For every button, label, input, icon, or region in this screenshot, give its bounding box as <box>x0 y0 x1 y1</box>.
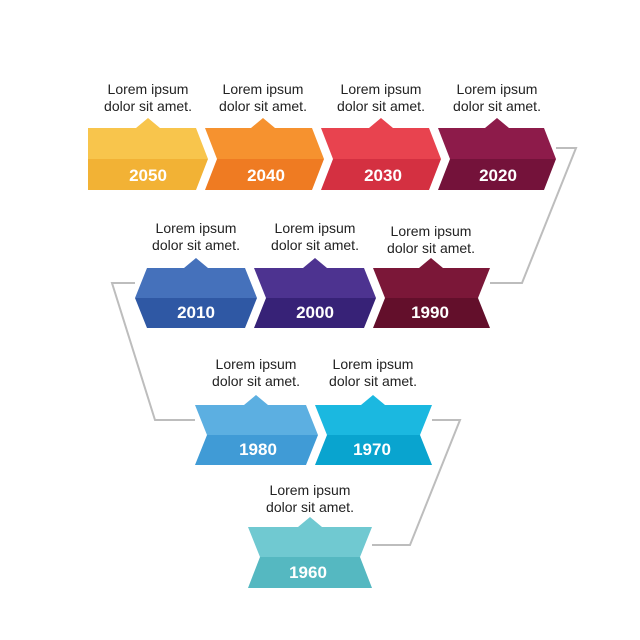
block: 1980: Lorem ipsum <box>216 356 296 372</box>
block: 1960 <box>248 482 372 588</box>
block: 2000: dolor sit amet. <box>271 237 359 253</box>
connector lines <box>112 148 576 545</box>
block: 2040: dolor sit amet. <box>219 98 307 114</box>
block: 1970: dolor sit amet. <box>329 373 417 389</box>
block: 2030: 2030 <box>364 166 402 185</box>
block: 1960: 1960 <box>289 563 327 582</box>
block: 2050: Lorem ipsum <box>108 81 188 97</box>
block: 1960: dolor sit amet. <box>266 499 354 515</box>
block: 2010 <box>135 220 257 328</box>
block: 1980 <box>195 356 318 465</box>
block: 1970: 1970 <box>353 440 391 459</box>
block: 2010: Lorem ipsum <box>156 220 236 236</box>
block: 2020 <box>438 81 556 190</box>
block: 2020: dolor sit amet. <box>453 98 541 114</box>
block: 2030: dolor sit amet. <box>337 98 425 114</box>
block: 1980: 1980 <box>239 440 277 459</box>
block: 1990: Lorem ipsum <box>391 223 471 239</box>
block: 1990: 1990 <box>411 303 449 322</box>
block: 1980: dolor sit amet. <box>212 373 300 389</box>
block: 2000: Lorem ipsum <box>275 220 355 236</box>
block: 1970: Lorem ipsum <box>333 356 413 372</box>
block: 2050: dolor sit amet. <box>104 98 192 114</box>
block: 2010: dolor sit amet. <box>152 237 240 253</box>
block: 1990 <box>373 223 490 328</box>
block: 2030: Lorem ipsum <box>341 81 421 97</box>
block: 2040: Lorem ipsum <box>223 81 303 97</box>
block: 2010: 2010 <box>177 303 215 322</box>
block: 2020: 2020 <box>479 166 517 185</box>
block: 2040 <box>205 81 324 190</box>
block: 2000: 2000 <box>296 303 334 322</box>
block: 1970 <box>315 356 432 465</box>
block: 2000 <box>254 220 376 328</box>
block: 2050: 2050 <box>129 166 167 185</box>
block: 2030 <box>321 81 441 190</box>
block: 1960: Lorem ipsum <box>270 482 350 498</box>
block: 2040: 2040 <box>247 166 285 185</box>
block: 2050 <box>88 81 208 190</box>
block: 2020: Lorem ipsum <box>457 81 537 97</box>
block: 1990: dolor sit amet. <box>387 240 475 256</box>
